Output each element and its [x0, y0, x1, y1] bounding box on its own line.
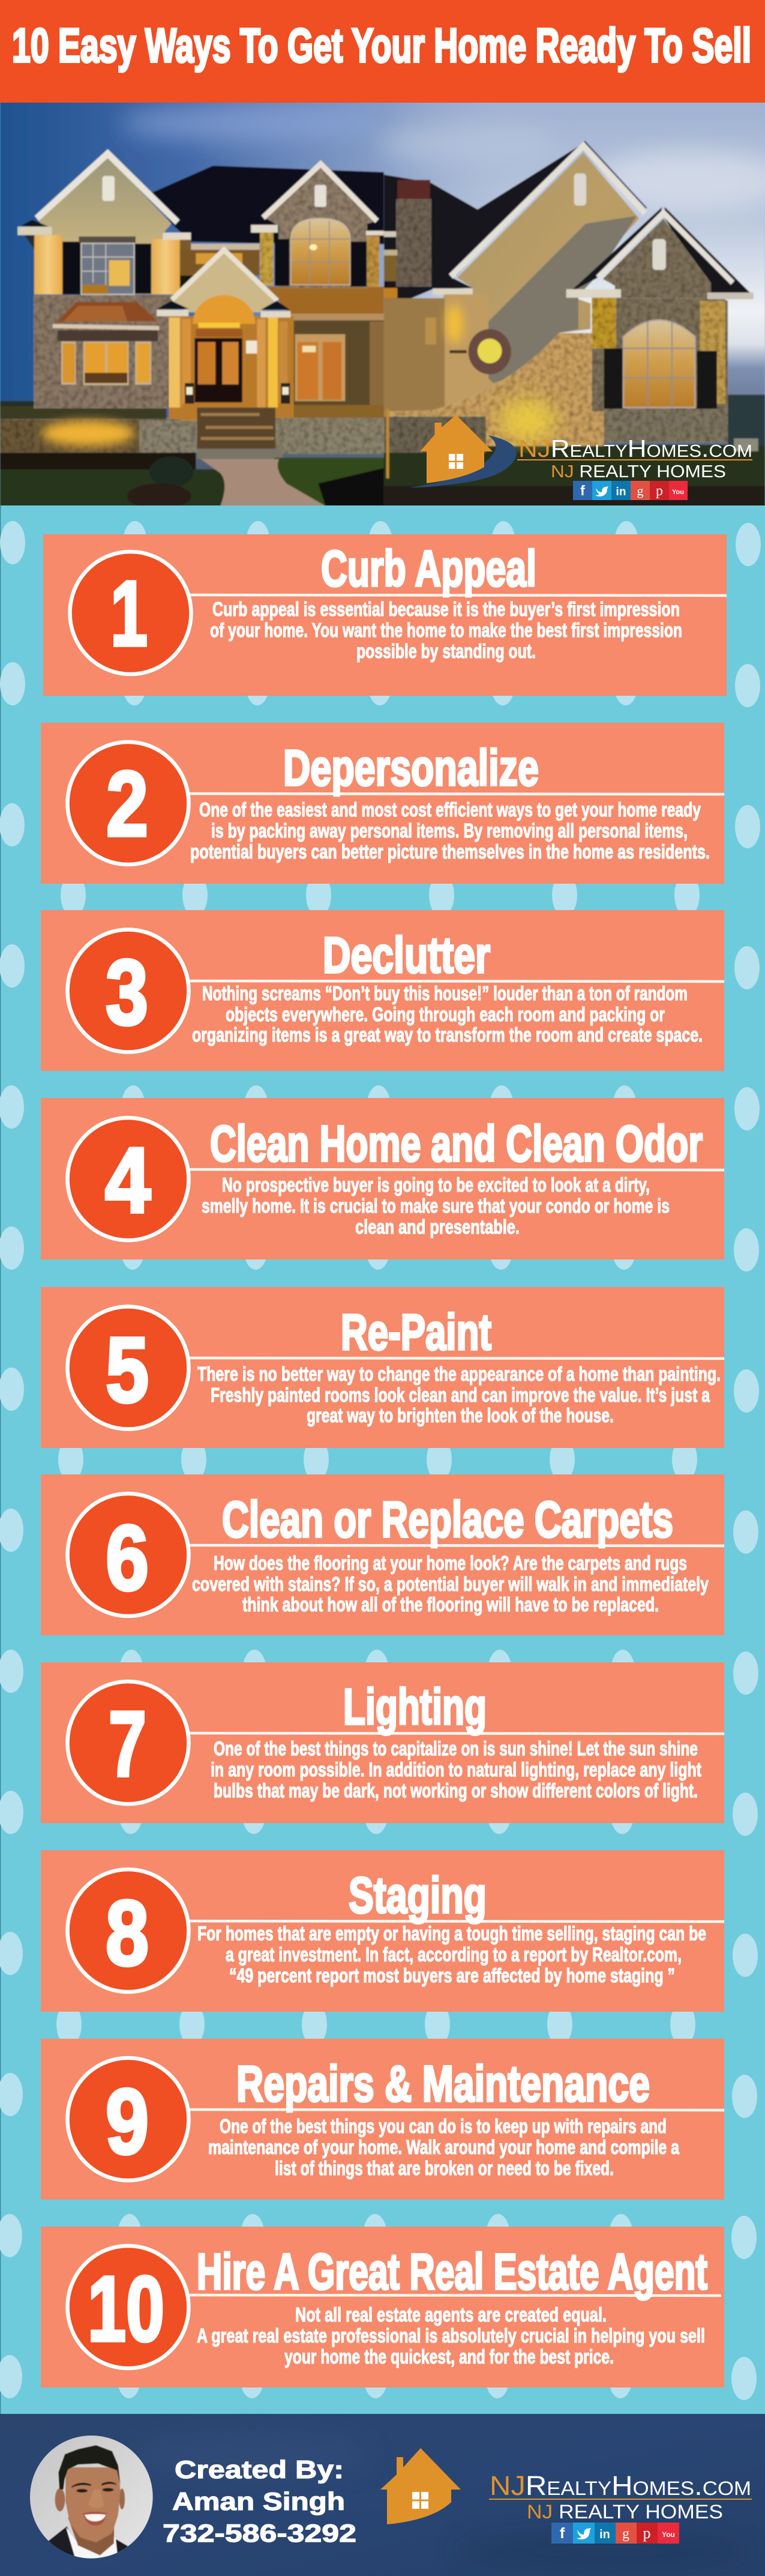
number badge 10 — [67, 2246, 188, 2368]
heading: Lighting — [343, 1679, 487, 1735]
logo icon: orange house with blue swoosh — [409, 415, 517, 487]
heading: Depersonalize — [283, 740, 539, 796]
title banner — [0, 0, 765, 103]
heading: Declutter — [323, 927, 490, 983]
body text: possible by standing out. — [356, 640, 536, 662]
footer social media icons: You — [662, 2530, 675, 2539]
footer social media icons — [551, 2523, 679, 2544]
footer logo text: NJ Realty Homes: NJ REALTY HOMES — [527, 2501, 723, 2523]
footer social media icons: in — [599, 2528, 610, 2541]
step 8 panel: Staging — [41, 1850, 724, 2012]
heading: Curb Appeal — [321, 540, 536, 597]
social media icons: g — [637, 483, 643, 498]
hero photo: illuminated house at dusk — [0, 99, 765, 509]
step 7 panel: Lighting — [41, 1662, 724, 1823]
heading: Re-Paint — [341, 1304, 491, 1360]
social media icons: p — [656, 483, 663, 499]
body text — [208, 2115, 679, 2179]
footer social media icons: p — [643, 2524, 650, 2542]
step 2 panel: Depersonalize — [41, 723, 724, 884]
body text — [190, 798, 710, 863]
body text — [197, 1363, 721, 1426]
number badge 7 — [67, 1682, 188, 1804]
body text — [192, 982, 703, 1046]
number badge 2: 2 — [106, 752, 148, 855]
number badge 9 — [67, 2058, 188, 2180]
agent portrait — [28, 2433, 156, 2562]
number badge 7: 7 — [109, 1692, 146, 1796]
social media icons: You — [672, 489, 684, 496]
body text — [202, 1174, 670, 1238]
number badge 1: 1 — [110, 562, 148, 665]
logo on the photo — [409, 415, 752, 500]
body text — [192, 1552, 709, 1615]
number badge 4: 4 — [105, 1129, 151, 1232]
number badge 9: 9 — [106, 2070, 149, 2173]
page background with polka dots — [0, 505, 765, 2414]
step 3 panel: Declutter — [41, 910, 724, 1071]
step 10 panel: Hire A Great Real Estate Agent — [41, 2227, 724, 2387]
step 6 panel: Clean or Replace Carpets — [41, 1474, 724, 1635]
logo text: NJRealtyHomes.com: NJRealtyHomes.com — [518, 435, 752, 462]
step 9 panel: Repairs & Maintenance — [41, 2039, 724, 2200]
footer social media icons: f — [560, 2525, 565, 2542]
number badge 6 — [67, 1494, 188, 1616]
body text: Not all real estate agents are created equal. — [295, 2303, 607, 2326]
step 1 panel: Curb Appeal — [43, 534, 727, 696]
credit text — [163, 2455, 356, 2547]
number badge 3 — [67, 929, 188, 1052]
number badge 5: 5 — [106, 1318, 149, 1422]
number badge 4 — [67, 1118, 188, 1240]
social media icons — [573, 481, 688, 500]
body text — [197, 1922, 706, 1986]
social media icons: f — [580, 483, 585, 498]
social media icons: in — [616, 486, 626, 498]
number badge 3: 3 — [106, 941, 148, 1044]
body text: list of things that are broken or need to be fixed. — [275, 2157, 614, 2179]
body text: your home the quickest, and for the best price. — [284, 2345, 614, 2368]
body text: great way to brighten the look of the house. — [307, 1404, 614, 1426]
heading: Staging — [349, 1867, 487, 1923]
number badge 10: 10 — [88, 2257, 164, 2360]
credit text: 732-586-3292 — [163, 2519, 356, 2547]
left half of the house — [0, 154, 387, 509]
footer logo icon — [380, 2448, 461, 2524]
step 4 panel: Clean Home and Clean Odor — [41, 1098, 724, 1259]
footer social media icons: g — [622, 2526, 629, 2542]
number badge 6: 6 — [106, 1506, 149, 1609]
body text — [210, 598, 682, 662]
footer panel — [0, 2414, 765, 2576]
credit text: Created By: — [175, 2455, 344, 2484]
logo text: NJ Realty Homes: NJ REALTY HOMES — [551, 462, 726, 481]
number badge 8 — [67, 1869, 188, 1992]
number badge 8: 8 — [106, 1881, 149, 1985]
credit text: Aman Singh — [172, 2487, 345, 2515]
number badge 1 — [70, 552, 191, 674]
body text — [211, 1737, 701, 1802]
body text: clean and presentable. — [355, 1216, 520, 1238]
number badge 5 — [67, 1306, 188, 1429]
footer logo text: NJRealtyHomes.com: NJRealtyHomes.com — [490, 2470, 751, 2501]
right half of the house — [384, 141, 765, 507]
body text — [197, 2303, 705, 2368]
step 5 panel: Re-Paint — [41, 1287, 724, 1448]
number badge 2 — [67, 742, 188, 864]
